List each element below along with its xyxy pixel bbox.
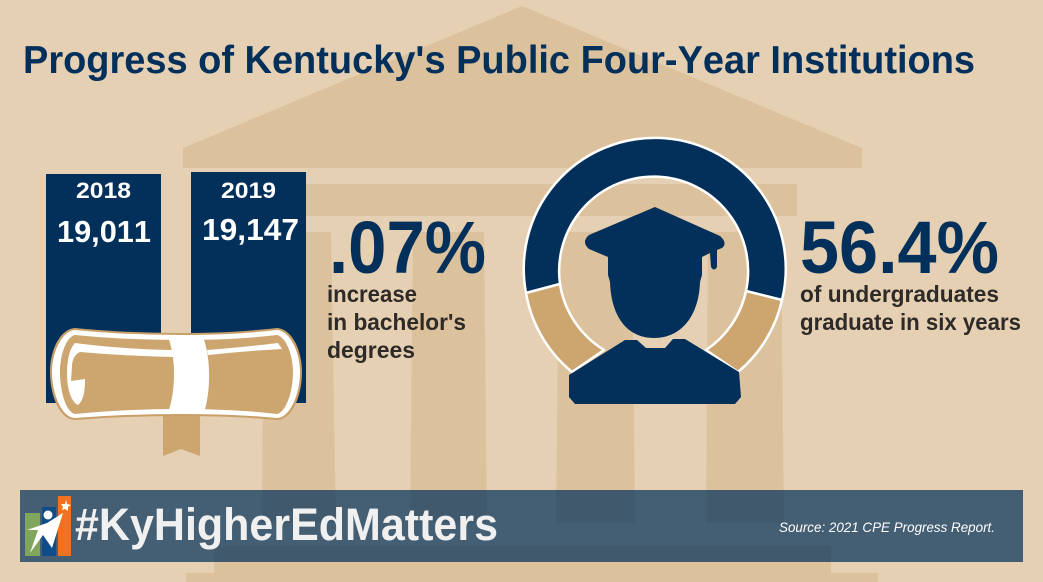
bar: 2019: 19,147: [202, 212, 299, 247]
donut chart: 56.4%: [524, 138, 786, 372]
bar: 2018: 2018: [76, 178, 131, 203]
icon: graduate: [569, 207, 741, 404]
text: of undergraduates graduate in six years: graduate in six years: [800, 309, 1021, 335]
stat: .07%: .07%: [329, 206, 486, 289]
icon: logo: [25, 496, 71, 556]
bar: 2018: [46, 174, 161, 403]
text: increase in bachelor's degrees: in bachelor's: [327, 309, 466, 335]
text: increase in bachelor's degrees: degrees: [327, 337, 415, 363]
icon: diploma scroll: [50, 328, 302, 456]
source note: Source: 2021 CPE Progress Report.: [779, 519, 995, 535]
bar: 2018: 19,011: [57, 214, 151, 249]
text: increase in bachelor's degrees: [327, 281, 466, 363]
footer banner: [20, 490, 1023, 562]
text: of undergraduates graduate in six years: [800, 281, 1021, 335]
hashtag: #KyHigherEdMatters: [75, 499, 498, 550]
text: increase in bachelor's degrees: increase: [327, 281, 417, 307]
bar: 2019: [191, 172, 306, 403]
title: Progress of Kentucky's Public Four-Year Institutions: [23, 39, 975, 82]
stat: 56.4%: 56.4%: [800, 206, 999, 289]
text: of undergraduates graduate in six years: of undergraduates: [800, 281, 999, 307]
bar: 2019: 2019: [221, 178, 276, 203]
background building: [183, 6, 878, 582]
